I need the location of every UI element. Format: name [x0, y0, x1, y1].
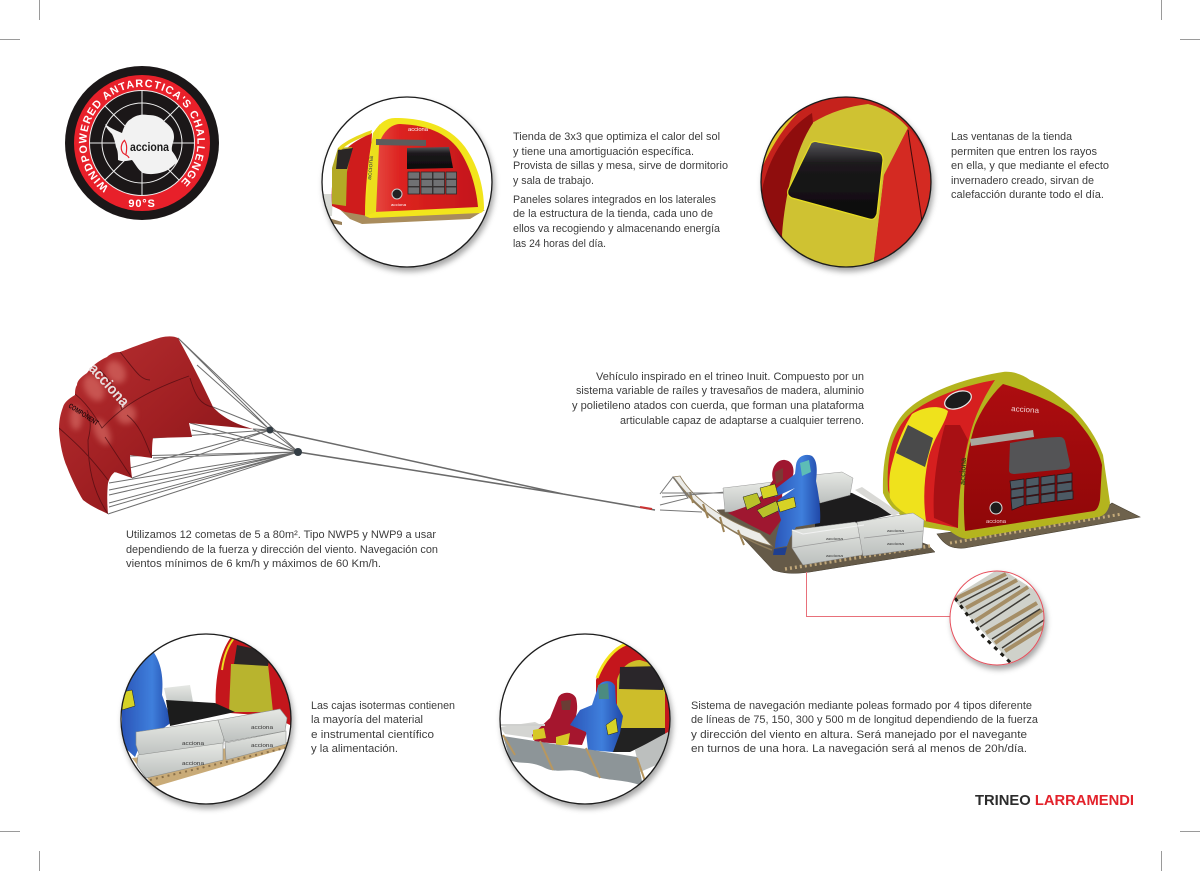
- sled platform: [660, 472, 935, 573]
- inset tent: [596, 640, 672, 735]
- main tent: [883, 372, 1110, 539]
- inset: isothermal boxes: [121, 634, 300, 804]
- text: navigation: y dirección del viento en altura. Será manejado por el navegante: [691, 729, 1027, 741]
- cargo boxes: [792, 513, 924, 565]
- main tent: acciona: [1011, 404, 1040, 415]
- text: navigation: en turnos de una hora. La navegación será al menos de 20h/día.: [691, 743, 1027, 755]
- text: kites: dependiendo de la fuerza y dirección del viento. Navegación con: [126, 544, 438, 556]
- text: windows description: en ella, y que mediante el efecto: [951, 160, 1109, 172]
- kite highlights: [70, 357, 136, 448]
- sled rear box: [813, 472, 853, 503]
- inset: isothermal boxes: acciona: [251, 743, 273, 749]
- inset window: [788, 141, 883, 219]
- cargo boxes: acciona: [826, 553, 844, 558]
- inset sail: [503, 736, 643, 786]
- text: tent description: y tiene una amortiguación específica.: [513, 146, 694, 158]
- inset dark well: [166, 700, 235, 726]
- cargo boxes: acciona: [826, 536, 844, 541]
- tent front face: [964, 384, 1102, 531]
- tent left panel: [888, 380, 995, 528]
- tent side window: [896, 425, 933, 467]
- text: vehicle: [572, 371, 865, 427]
- kite canopy: [59, 336, 253, 514]
- badge: Windpowered Antarctica's Challenge logo: acciona: [130, 140, 169, 154]
- cargo boxes: acciona: [887, 541, 905, 546]
- inset: isothermal boxes: acciona: [182, 741, 204, 747]
- text: navigation: Sistema de navegación mediante poleas formado por 4 tipos diferente: [691, 700, 1032, 712]
- inset red person: [532, 693, 590, 745]
- inset: navigation crew: [500, 634, 672, 804]
- text: tent description: de la estructura de la tienda, cada uno de: [513, 208, 713, 220]
- inset: sled rails detail: [950, 568, 1050, 668]
- text: kites: vientos mínimos de 6 km/h y máximos de 60 Km/h.: [126, 558, 381, 570]
- crew: blue person: [760, 455, 820, 555]
- badge: Windpowered Antarctica's Challenge logo: WINDPOWERED ANTARCTICA'S CHALLENGE: [78, 80, 205, 193]
- inset: isothermal boxes: acciona: [251, 725, 273, 731]
- text: boxes: [311, 700, 455, 755]
- main tent: acciona: [986, 519, 1006, 525]
- inset back box: [500, 722, 545, 738]
- tent solar panel: [1010, 473, 1073, 510]
- text: tent description: Provista de sillas y mesa, sirve de dormitorio: [513, 160, 728, 172]
- inset right box: [635, 732, 668, 772]
- crew: red person: [728, 460, 794, 535]
- tent front window: [1009, 437, 1070, 474]
- kite lines: [108, 338, 298, 514]
- inset: tent window detail: [760, 97, 935, 270]
- inset: tent front: [322, 97, 492, 267]
- text: boxes: e instrumental científico: [311, 729, 434, 741]
- text: vehicle: sistema variable de raíles y travesaños de madera, aluminio: [576, 385, 864, 397]
- tent badge: [942, 387, 974, 413]
- inset blue person: [570, 681, 623, 752]
- inset: isothermal boxes: acciona: [182, 761, 204, 767]
- text: windows description: permiten que entren los rayos: [951, 146, 1097, 158]
- text: vehicle: y polietileno atados con cuerda, que forman una plataforma: [572, 400, 865, 412]
- tent roller bar: [970, 430, 1034, 446]
- kite tow lines: [270, 430, 655, 510]
- inset rails: [132, 742, 288, 787]
- text: boxes: la mayoría del material: [311, 714, 423, 726]
- sled interior: [815, 488, 895, 530]
- text: kites: [126, 529, 438, 570]
- text: navigation: de líneas de 75, 150, 300 y 500 m de longitud dependiendo de la fuerza: [691, 714, 1039, 726]
- text: windows description: Las ventanas de la tienda: [951, 131, 1073, 143]
- inset: tent front: acciona: [408, 127, 428, 133]
- tent emblem: [392, 189, 402, 199]
- badge: Windpowered Antarctica's Challenge logo: [65, 66, 219, 220]
- callout line: [806, 572, 950, 616]
- tent sled: [340, 210, 485, 224]
- text: tent description: las 24 horas del día.: [513, 238, 606, 250]
- cargo boxes: acciona: [887, 528, 905, 533]
- main tent: acciona: [958, 457, 968, 485]
- text: tent description: y sala de trabajo.: [513, 175, 594, 187]
- tent window: [407, 147, 453, 169]
- badge: Windpowered Antarctica's Challenge logo: 90°S: [128, 198, 156, 210]
- text: tent description: Tienda de 3x3 que optimiza el calor del sol: [513, 131, 720, 143]
- inset person: [122, 650, 172, 757]
- sled prow sail: [673, 476, 772, 546]
- text: windows description: calefacción durante todo el día.: [951, 189, 1104, 201]
- kite canopy: COMPONENT: [67, 403, 100, 427]
- title: TRINEO LARRAMENDI: [975, 792, 1134, 809]
- text: windows description: [951, 131, 1109, 201]
- inset: tent front: acciona: [391, 202, 407, 207]
- tent front dome: [365, 118, 484, 218]
- inset: tent front: acciona: [367, 155, 375, 180]
- text: boxes: Las cajas isotermas contienen: [311, 700, 455, 712]
- text: tent description: ellos va recogiendo y almacenando energía: [513, 223, 721, 235]
- inset tent: [216, 638, 290, 725]
- text: windows description: invernadero creado, sirvan de: [951, 175, 1094, 187]
- text: vehicle: articulable capaz de adaptarse a cualquier terreno.: [620, 415, 864, 427]
- tent bar: [376, 139, 426, 146]
- kite canopy: acciona: [85, 360, 133, 411]
- text: tent description: [513, 131, 728, 250]
- text: kites: Utilizamos 12 cometas de 5 a 80m². Tipo NWP5 y NWP9 a usar: [126, 529, 436, 541]
- solar panels: [408, 172, 456, 194]
- text: tent description: Paneles solares integrados en los laterales: [513, 194, 716, 206]
- inset small box: [164, 685, 193, 702]
- sled left box: [723, 482, 780, 512]
- tent sled base: [937, 503, 1140, 548]
- kite hubs: [266, 426, 302, 456]
- inset dark well: [612, 728, 665, 752]
- inset boxes: [136, 720, 225, 757]
- text: navigation: [691, 700, 1039, 755]
- text: boxes: y la alimentación.: [311, 743, 398, 755]
- tent yellow door: [889, 407, 948, 521]
- text: vehicle: Vehículo inspirado en el trineo Inuit. Compuesto por un: [596, 371, 864, 383]
- tent side panel: [332, 133, 372, 216]
